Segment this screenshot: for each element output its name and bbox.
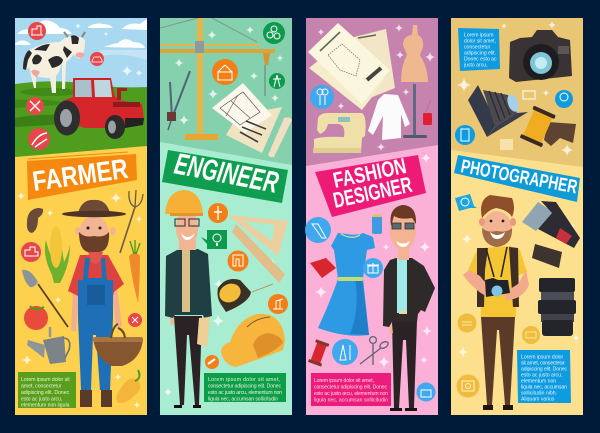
heading: farmer banner: FARMER <box>31 153 130 197</box>
icon: red circle machine <box>21 242 41 262</box>
icon: red purse <box>310 258 336 278</box>
icon: red circle tools <box>128 313 142 327</box>
icon: red circle tractor <box>28 22 46 40</box>
icon: folder outline <box>523 91 535 99</box>
heading: engineer banner: ENGINEER <box>172 147 281 200</box>
sparkles <box>17 192 142 408</box>
icon: scissors <box>360 337 389 365</box>
text box: top note <box>458 28 500 71</box>
icon: watering can <box>27 327 70 364</box>
icon: blue dress <box>318 233 375 336</box>
icon: red circle wheat <box>28 128 50 150</box>
icon: lens <box>538 278 576 336</box>
character: photographer <box>463 195 529 410</box>
panel: fashion designer <box>305 18 438 415</box>
text box: photographer: sit amet, consectetur <box>521 360 565 366</box>
text box: engineer: esto ac justo arcu, elementum non <box>208 390 282 396</box>
green field <box>15 81 147 157</box>
icon: pepper <box>116 370 140 403</box>
text box: farmer: amet, consectetur <box>21 384 62 390</box>
upper mauve background <box>306 18 438 166</box>
character: fashion designer <box>383 205 435 411</box>
icon: yellow circle camera <box>456 374 480 398</box>
text box: engineer: Lorem ipsum dolor sit amet, <box>208 377 280 383</box>
text box: photographer: Lorem ipsum dolor <box>521 354 563 360</box>
icon: small orange circle <box>205 355 219 369</box>
icon: blue circle balloon <box>555 90 573 108</box>
character: engineer <box>165 190 212 408</box>
icon: shovel <box>22 270 68 327</box>
icon: blue circle bag <box>416 382 436 402</box>
icon: green lightbulb speech box <box>201 230 227 249</box>
cow <box>23 32 85 93</box>
icon: long ruler <box>232 224 285 283</box>
icon: hard hat <box>221 314 285 367</box>
text box: fashion designer: ligula nec, accumsan sollicitudin <box>314 398 388 404</box>
icon: blue circle tools <box>332 339 358 365</box>
icon: red thread <box>423 100 432 125</box>
text box: fashion designer <box>311 373 391 406</box>
icon: potato <box>27 208 43 233</box>
icon: blue circle figure <box>310 85 334 109</box>
icon: clipboard <box>197 317 210 347</box>
icon: tape measure <box>216 279 273 312</box>
icon: basket <box>93 324 143 366</box>
text box: farmer: adipiscing elit. Donec <box>21 390 70 396</box>
icon: compass <box>167 71 190 130</box>
text box: fashion designer: Lorem ipsum dolor sit amet, <box>314 378 374 384</box>
icon: blue circle shoe <box>305 217 331 243</box>
text box: engineer <box>204 373 286 402</box>
text box: top note: justo arcu, <box>463 62 488 68</box>
icon: pitchfork <box>120 190 143 253</box>
icon: blue circle gift <box>363 258 383 278</box>
icon: orange circle pump <box>268 294 288 314</box>
text box: farmer: esto ac justo arcu, <box>21 396 62 402</box>
heading: engineer banner <box>162 147 288 203</box>
icon: green gears circle <box>263 22 285 44</box>
heading: fashion designer banner <box>315 153 426 217</box>
text box: photographer: elementum non <box>521 378 556 384</box>
icon: blue circle phone <box>455 125 475 145</box>
icon: tomato <box>24 306 48 330</box>
icon: dslr camera <box>509 30 572 82</box>
text box: top note: consectetur <box>464 44 491 50</box>
icon: grid outline <box>500 139 513 150</box>
icon: blueprints <box>212 83 282 153</box>
icon: blue globe speech <box>455 194 477 211</box>
text box: farmer: Lorem ipsum dolor sit <box>21 377 70 383</box>
text box: fashion designer: esto ac justo arcu, elementum non <box>314 391 388 397</box>
text box: photographer: Aliquam varius <box>521 396 555 402</box>
text box: photographer: esto ac justo arcu, <box>521 372 562 378</box>
text box: top note: Donec esto ac <box>464 56 497 62</box>
text box: photographer: adipiscing elit. Donec <box>521 366 567 372</box>
heading: fashion designer banner: FASHION <box>331 153 408 193</box>
text box: photographer: sollicitudin nibh. <box>521 390 557 396</box>
sky with clouds <box>15 18 147 88</box>
icon: folding camera <box>468 85 528 137</box>
text box: engineer: ligula nec, accumsan sollicitudin <box>208 396 278 402</box>
upper green background <box>160 18 292 165</box>
icon: red circle windmill <box>26 97 44 115</box>
heading: fashion designer banner: DESIGNER <box>331 172 414 213</box>
text box: photographer: ligula nec, accumsan <box>521 384 567 390</box>
text box: fashion designer: consectetur adipiscing elit. Donec <box>314 384 387 390</box>
tractor <box>54 78 144 139</box>
icon: paper roll <box>268 117 292 157</box>
icon: flash <box>522 201 580 248</box>
icon: mannequin <box>401 25 428 138</box>
icon: thread jar <box>372 214 382 234</box>
panel: farmer <box>15 18 147 415</box>
sparkles <box>164 26 284 396</box>
icon: orange cargo circle <box>212 59 238 85</box>
text box: top note: dolor sit amet, <box>464 38 496 44</box>
panel: engineer <box>160 18 292 415</box>
character: farmer <box>62 200 126 407</box>
icon: orange circle crane <box>208 203 228 223</box>
text box: engineer: consectetur adipiscing elit. Donec <box>208 384 281 390</box>
text box: top note: Lorem ipsum <box>464 32 493 38</box>
text box: farmer: elementum non ligula <box>21 402 70 408</box>
icon: red spool <box>308 339 329 367</box>
icon: red circle car <box>90 52 104 66</box>
sparkles <box>315 24 435 368</box>
text box: photographer <box>517 350 571 403</box>
icon: sewing machine <box>313 113 366 153</box>
text box: farmer <box>18 372 76 408</box>
icon: orange circle machine <box>228 250 248 272</box>
icon: green pylon circle <box>269 73 285 89</box>
sparkles <box>457 21 580 357</box>
icon: carrot <box>129 240 140 303</box>
icon: film roll <box>520 106 576 147</box>
panel: photographer <box>451 18 583 415</box>
icon: corn <box>45 226 70 283</box>
icon: yellow circle video <box>522 326 540 344</box>
text box: top note: adipiscing elit. <box>464 50 496 56</box>
icon: white shirt <box>368 94 410 140</box>
icon: yellow circle glasses <box>458 314 476 332</box>
icon: sd card <box>532 244 562 268</box>
icon: triangle ruler <box>228 215 288 256</box>
upper tan background <box>451 18 583 167</box>
crane <box>160 18 275 140</box>
icon: pattern sheets <box>308 23 395 110</box>
